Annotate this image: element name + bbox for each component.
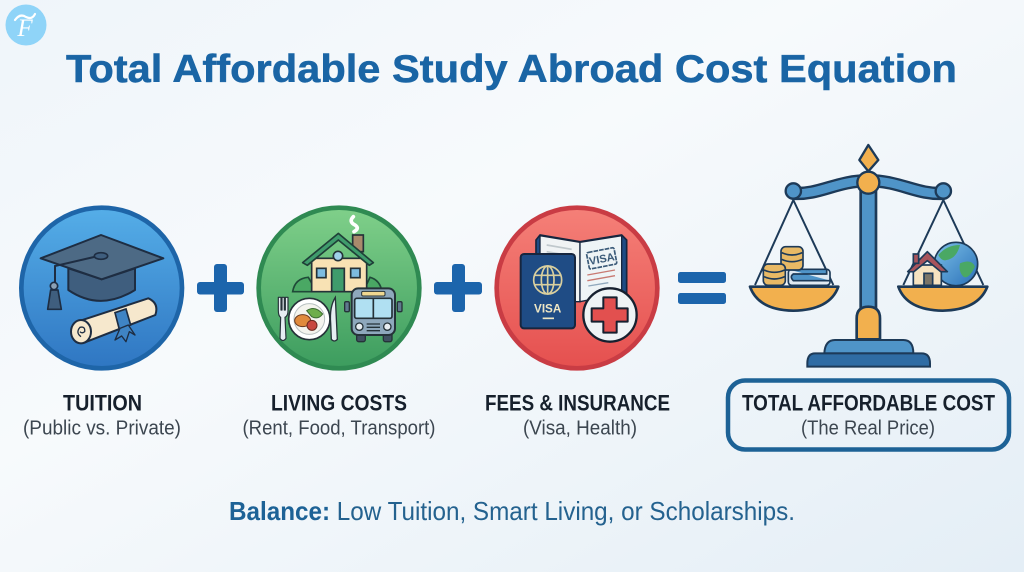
icon: fees circle with passport and medical cross	[497, 208, 657, 368]
logo badge: F	[16, 15, 33, 42]
total box: (The Real Price)	[801, 416, 935, 440]
title: Total Affordable Study Abroad Cost Equation	[66, 48, 957, 91]
icon: fees circle with passport and medical cross: VISA	[588, 251, 616, 268]
coins and book on left pan	[763, 247, 830, 285]
plus sign 1	[197, 264, 244, 312]
label: fees and insurance	[485, 390, 670, 440]
icon: fees circle with passport and medical cross: VISA	[534, 303, 562, 316]
balance note: Balance: Low Tuition, Smart Living, or Scholarships.	[229, 496, 795, 526]
label: living costs: (Rent, Food, Transport)	[242, 416, 436, 440]
label: tuition	[23, 390, 181, 440]
total box	[728, 380, 1009, 450]
globe and house on right pan	[908, 242, 978, 286]
icon: living costs circle with house, meal and bus	[259, 208, 419, 368]
icon: tuition circle with graduation cap and diploma	[21, 208, 182, 368]
equals sign	[678, 272, 726, 304]
icon: balance scale	[750, 145, 987, 367]
label: living costs	[242, 390, 436, 440]
label: tuition: TUITION	[63, 390, 142, 416]
label: living costs: LIVING COSTS	[271, 390, 407, 416]
label: tuition: (Public vs. Private)	[23, 416, 181, 440]
label: fees and insurance: FEES & INSURANCE	[485, 390, 670, 416]
label: fees and insurance: (Visa, Health)	[523, 416, 637, 440]
plus sign 2	[434, 264, 482, 312]
logo badge	[6, 4, 46, 46]
